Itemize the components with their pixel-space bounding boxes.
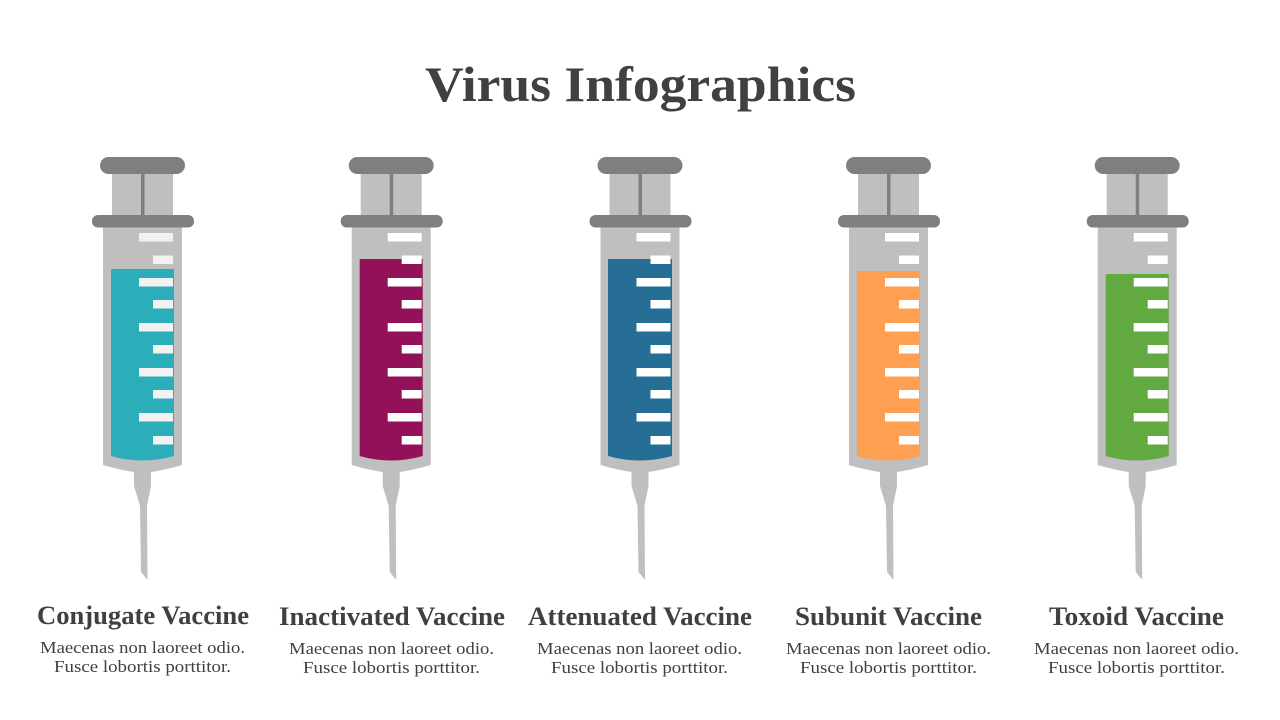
syringe: attenuated xyxy=(590,157,692,580)
syringe: toxoid xyxy=(1087,157,1189,580)
text: inactivated description: Fusce lobortis porttitor. xyxy=(303,658,480,677)
panel: toxoid vaccine xyxy=(1034,157,1239,677)
heading: attenuated: Attenuated Vaccine xyxy=(528,602,752,631)
panel: subunit vaccine xyxy=(786,157,991,677)
text: subunit description: Fusce lobortis porttitor. xyxy=(800,658,977,677)
syringe: conjugate xyxy=(92,157,194,580)
heading: toxoid: Toxoid Vaccine xyxy=(1049,602,1224,631)
heading: inactivated: Inactivated Vaccine xyxy=(279,602,505,631)
panel: attenuated vaccine xyxy=(528,157,752,677)
heading: conjugate: Conjugate Vaccine xyxy=(37,601,249,630)
text: subunit description: Maecenas non laoreet odio. xyxy=(786,639,991,658)
title: Virus Infographics xyxy=(425,56,856,112)
text: inactivated description: Maecenas non laoreet odio. xyxy=(289,639,494,658)
text: toxoid description: Fusce lobortis porttitor. xyxy=(1048,658,1225,677)
text: toxoid description: Maecenas non laoreet odio. xyxy=(1034,639,1239,658)
text: conjugate description: Maecenas non laoreet odio. xyxy=(40,638,245,657)
text: attenuated description: Fusce lobortis porttitor. xyxy=(551,658,728,677)
panel: inactivated vaccine xyxy=(279,157,505,677)
heading: subunit: Subunit Vaccine xyxy=(795,602,982,631)
text: attenuated description: Maecenas non laoreet odio. xyxy=(537,639,742,658)
syringe: subunit xyxy=(838,157,940,580)
text: conjugate description: Fusce lobortis porttitor. xyxy=(54,657,231,676)
syringe: inactivated xyxy=(341,157,443,580)
panel: conjugate vaccine xyxy=(37,157,249,676)
